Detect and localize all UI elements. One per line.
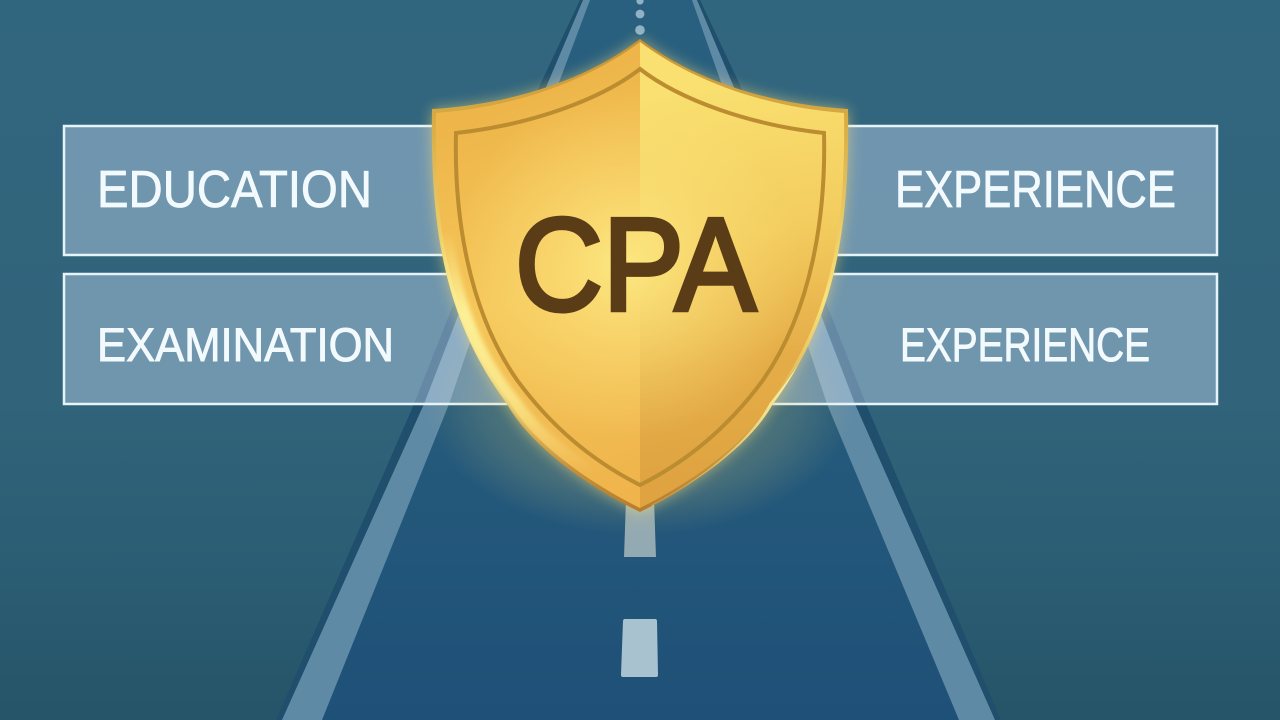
icon: gold shield bbox=[432, 39, 848, 512]
centre dots bbox=[635, 0, 645, 35]
panel: experience bottom: EXPERIENCE bbox=[900, 318, 1150, 371]
panel: experience top bbox=[800, 126, 1217, 255]
road surface bbox=[322, 0, 959, 720]
panel: examination bbox=[64, 274, 524, 404]
panel: experience bottom bbox=[760, 274, 1217, 404]
shield left half bbox=[436, 42, 640, 508]
road edge shadows bbox=[276, 0, 1001, 720]
panel: experience top: EXPERIENCE bbox=[895, 161, 1176, 219]
shield right half bbox=[640, 42, 844, 508]
centre dash upper bbox=[624, 500, 656, 557]
panel: examination: EXAMINATION bbox=[97, 318, 394, 371]
shield right edge highlight bbox=[652, 364, 798, 506]
shield label: CPA bbox=[515, 191, 756, 338]
shield left edge highlight bbox=[444, 240, 574, 458]
shield central highlight bbox=[456, 69, 824, 485]
shield glow bbox=[425, 39, 855, 535]
panel: education bbox=[64, 126, 484, 255]
road bbox=[276, 0, 1001, 720]
shield rim bbox=[432, 39, 848, 512]
panel: education: EDUCATION bbox=[97, 161, 372, 219]
shield inner line bbox=[456, 69, 824, 485]
right road edge line bbox=[692, 0, 995, 720]
centre dash lower bbox=[623, 621, 656, 675]
left road edge line bbox=[282, 0, 590, 720]
